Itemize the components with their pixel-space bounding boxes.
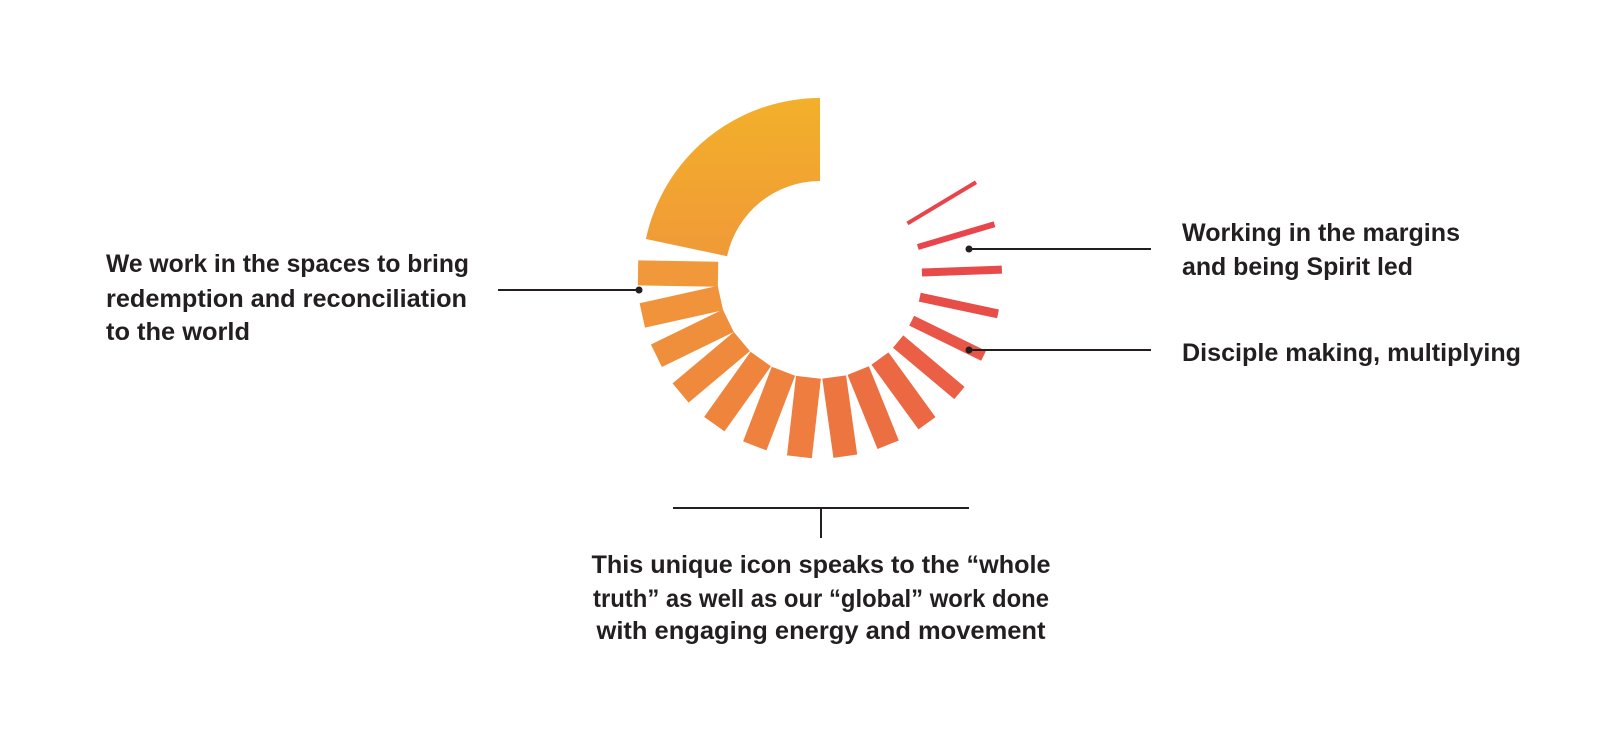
text: left description: to the world <box>106 318 250 346</box>
callout: right lower pointer <box>966 346 1151 354</box>
callout: right upper pointer <box>966 246 1151 252</box>
text: bottom description: This unique icon speaks to the “whole <box>592 551 1051 579</box>
icon arc <box>646 98 820 256</box>
text: bottom description: truth” as well as our “global” work done <box>593 585 1049 613</box>
text: disciple: Disciple making, multiplying <box>1182 339 1521 367</box>
text: margins: Working in the margins <box>1182 219 1460 247</box>
callout: left pointer <box>498 286 642 294</box>
text: margins: and being Spirit led <box>1182 253 1413 281</box>
text: left description <box>106 250 469 346</box>
text: bottom description: with engaging energy and movement <box>595 617 1046 645</box>
text: margins <box>1182 219 1460 281</box>
callout: bottom bracket <box>673 508 969 538</box>
text: left description: redemption and reconciliation <box>106 285 467 313</box>
icon: radial logo <box>638 98 1002 458</box>
text: left description: We work in the spaces to bring <box>106 250 469 278</box>
icon bars <box>638 181 1002 458</box>
text: bottom description <box>592 551 1051 645</box>
